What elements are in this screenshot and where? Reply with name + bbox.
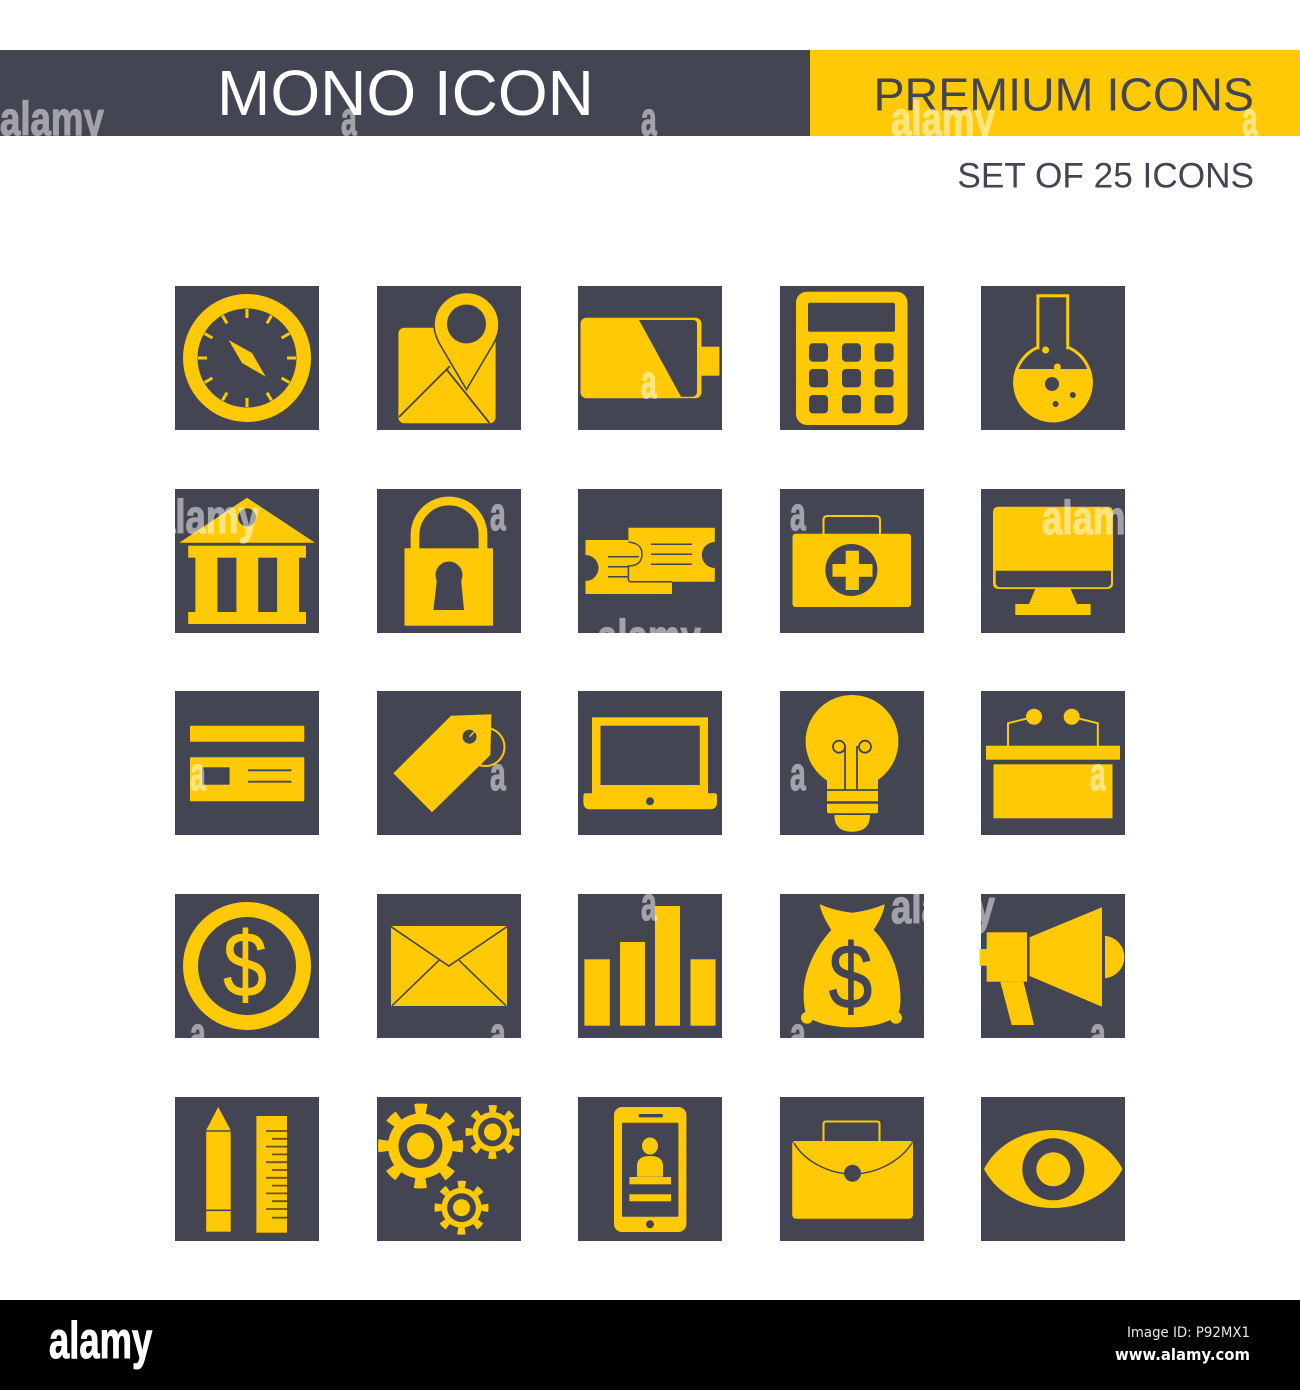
icon: money bag xyxy=(780,894,924,1038)
watermark overlay: a xyxy=(190,749,206,801)
subtitle: SET OF 25 ICONS xyxy=(957,156,1254,196)
watermark overlay: a xyxy=(341,94,357,146)
icon: light bulb xyxy=(780,691,924,835)
watermark overlay: alamy xyxy=(0,93,104,145)
watermark overlay: a xyxy=(790,1009,806,1061)
icon: briefcase xyxy=(780,1097,924,1241)
watermark overlay: a xyxy=(190,1009,206,1061)
watermark overlay: alamy xyxy=(891,93,995,145)
footer logo: alamy xyxy=(49,1310,152,1370)
top right gear xyxy=(469,1108,516,1156)
icon: eye xyxy=(981,1097,1125,1241)
watermark overlay: a xyxy=(790,489,806,541)
icon: compass xyxy=(175,286,319,430)
bottom gear xyxy=(438,1184,485,1231)
icon: monitor xyxy=(981,489,1125,633)
watermark overlay: alamy xyxy=(891,881,995,933)
icon: map pin xyxy=(377,286,521,430)
watermark overlay: alamy xyxy=(155,491,259,543)
watermark overlay: a xyxy=(490,1009,506,1061)
icon: tickets xyxy=(578,489,722,633)
premium icons panel xyxy=(810,50,1300,136)
website: www.alamy.com xyxy=(1115,1345,1250,1364)
icon: bank xyxy=(175,489,319,633)
watermark overlay: a xyxy=(1090,749,1106,801)
image id: Image ID: P92MX1 xyxy=(1127,1325,1250,1341)
watermark overlay xyxy=(0,93,1258,1061)
icon: padlock xyxy=(377,489,521,633)
watermark overlay: a xyxy=(641,879,657,931)
footer bar xyxy=(0,1300,1300,1390)
icon: megaphone xyxy=(980,894,1125,1038)
icon: money bag: $ xyxy=(829,926,872,1028)
watermark overlay: a xyxy=(1242,94,1258,146)
watermark overlay: a xyxy=(641,357,657,409)
icon: first aid kit xyxy=(780,489,924,633)
title panel xyxy=(0,50,810,136)
watermark overlay: a xyxy=(490,749,506,801)
title panel: MONO ICON xyxy=(217,57,594,129)
premium icons panel: PREMIUM ICONS xyxy=(873,68,1254,120)
icon: credit card xyxy=(175,691,319,835)
icon: laptop xyxy=(578,691,722,835)
watermark overlay: a xyxy=(790,749,806,801)
icon: podium xyxy=(981,691,1125,835)
icon: flask xyxy=(981,286,1125,430)
header band xyxy=(0,50,1300,136)
watermark overlay: a xyxy=(1090,1009,1106,1061)
icon: calculator xyxy=(780,286,924,430)
icon: pencil and ruler xyxy=(175,1097,319,1241)
large gear xyxy=(384,1109,458,1183)
icon: dollar coin xyxy=(175,894,319,1038)
icon: price tag xyxy=(377,691,521,835)
icon: smartphone profile xyxy=(578,1097,722,1241)
icon: gears xyxy=(377,1097,521,1241)
watermark overlay: alamy xyxy=(1042,492,1146,544)
watermark overlay: a xyxy=(490,489,506,541)
watermark overlay: alamy xyxy=(597,611,701,663)
icon: dollar coin: $ xyxy=(223,914,267,1016)
icon: envelope xyxy=(377,894,521,1038)
watermark overlay: a xyxy=(641,94,657,146)
icon: bar chart xyxy=(578,894,722,1038)
icon: battery xyxy=(578,286,722,430)
